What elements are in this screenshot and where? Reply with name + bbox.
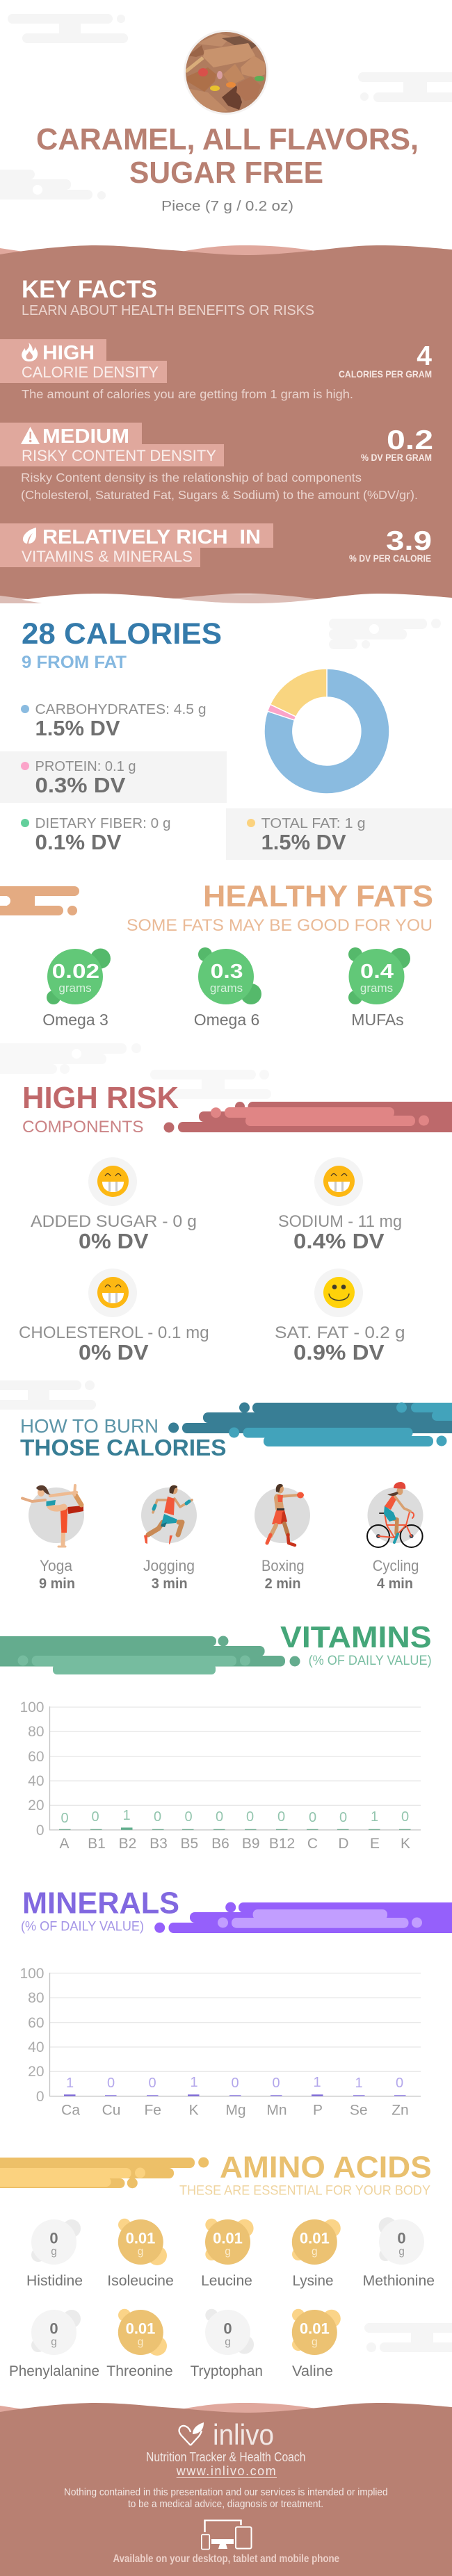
bar chart: vitamins: C bbox=[307, 1836, 318, 1852]
item: saturated fat: SAT. FAT - 0.2 g bbox=[275, 1323, 405, 1342]
serving size: Piece (7 g / 0.2 oz) bbox=[161, 199, 293, 214]
icon: cycling figure bbox=[367, 1482, 423, 1547]
bar chart: vitamins: 0 bbox=[184, 1809, 193, 1825]
bar chart: minerals: 100 bbox=[19, 1966, 45, 1982]
decorative bars bbox=[168, 1403, 452, 1446]
bar chart: vitamins: A bbox=[59, 1836, 70, 1852]
amino: isoleucine bbox=[107, 2219, 174, 2289]
icon: grinning face bbox=[97, 1277, 129, 1308]
amino: valine: g bbox=[312, 2336, 318, 2348]
panel: header bbox=[0, 14, 452, 214]
badge: omega 3: grams bbox=[58, 981, 92, 995]
panel: how to burn calories bbox=[0, 1380, 452, 1592]
bar chart: minerals: 20 bbox=[28, 2064, 45, 2080]
heading bbox=[21, 1887, 179, 1934]
amino: histidine: Histidine bbox=[26, 2272, 83, 2289]
item: added sugar: 0% DV bbox=[79, 1229, 149, 1253]
bar chart: minerals: 0 bbox=[231, 2076, 239, 2091]
fact: risky content density: MEDIUM bbox=[42, 425, 129, 448]
heading bbox=[20, 1415, 227, 1461]
amino: leucine: Leucine bbox=[201, 2272, 252, 2289]
bar chart: vitamins: 0 bbox=[60, 1811, 69, 1826]
bar chart: vitamins: 0 bbox=[246, 1809, 254, 1825]
item: cholesterol: 0% DV bbox=[79, 1340, 149, 1364]
heading: 9 FROM FAT bbox=[22, 653, 127, 672]
activity: cycling bbox=[367, 1482, 423, 1547]
legend: total fat bbox=[247, 816, 366, 854]
heading bbox=[22, 276, 314, 318]
amino: phenylalanine bbox=[9, 2310, 99, 2379]
bar chart: vitamins: 20 bbox=[28, 1798, 45, 1813]
amino: lysine: Lysine bbox=[292, 2272, 334, 2289]
bar chart: minerals: P bbox=[313, 2103, 323, 2119]
bar chart: vitamins: 1 bbox=[122, 1808, 131, 1823]
panel: key facts bbox=[0, 245, 452, 603]
badge: MUFAs bbox=[348, 947, 410, 1029]
legend: protein: PROTEIN: 0.1 g bbox=[35, 759, 136, 774]
legend: total fat: 1.5% DV bbox=[261, 830, 346, 854]
activity labels: 9 min bbox=[39, 1575, 75, 1592]
logo wordmark: inlivo bbox=[213, 2418, 274, 2451]
fact: risky content density: RISKY CONTENT DENSITY bbox=[22, 447, 216, 464]
bar chart: vitamins: 0 bbox=[154, 1809, 161, 1825]
bar chart: minerals: 1 bbox=[190, 2075, 198, 2090]
item: saturated fat bbox=[275, 1269, 405, 1364]
legend: protein: 0.3% DV bbox=[35, 773, 126, 797]
wave background bbox=[0, 245, 452, 603]
heading: HIGH RISK bbox=[22, 1082, 179, 1115]
bar chart: minerals: 0 bbox=[148, 2076, 156, 2091]
panel: amino acids bbox=[0, 2151, 452, 2379]
badge: MUFAs: grams bbox=[360, 981, 393, 995]
bar chart: minerals: Ca bbox=[61, 2103, 80, 2119]
legend: carbohydrates bbox=[21, 702, 206, 740]
decorative clouds bbox=[0, 1043, 271, 1099]
item: sodium bbox=[278, 1157, 402, 1253]
heading: AMINO ACIDS bbox=[220, 2151, 432, 2185]
badge: omega 6: Omega 6 bbox=[194, 1011, 259, 1029]
food photo: chocolate pieces bbox=[184, 30, 268, 115]
bar chart: vitamins: B2 bbox=[119, 1836, 136, 1852]
icon: smiling face bbox=[323, 1277, 355, 1308]
bar chart: vitamins: 0 bbox=[277, 1809, 285, 1825]
bar chart: minerals: K bbox=[189, 2103, 199, 2119]
icon: leaf bbox=[23, 528, 36, 544]
activity: boxing bbox=[255, 1484, 310, 1545]
bar chart: vitamins: 1 bbox=[371, 1809, 378, 1825]
amino: lysine: g bbox=[312, 2246, 318, 2258]
bar chart: vitamins bbox=[19, 1699, 421, 1852]
bar chart: minerals: Mn bbox=[266, 2103, 287, 2119]
heading: 28 CALORIES bbox=[22, 618, 222, 651]
bar chart: vitamins: 0 bbox=[309, 1810, 316, 1825]
bar chart: minerals: Cu bbox=[102, 2103, 120, 2119]
heading: LEARN ABOUT HEALTH BENEFITS OR RISKS bbox=[22, 303, 314, 318]
badge: omega 3: Omega 3 bbox=[42, 1011, 108, 1029]
amino: threonine: Threonine bbox=[106, 2363, 173, 2379]
amino: isoleucine: g bbox=[138, 2246, 143, 2258]
legend: total fat: TOTAL FAT: 1 g bbox=[261, 816, 366, 831]
bar chart: minerals: 0 bbox=[396, 2076, 403, 2091]
decorative cloud lower left bbox=[0, 170, 106, 199]
bar chart: vitamins: D bbox=[338, 1836, 349, 1852]
bar chart: minerals: 1 bbox=[313, 2075, 321, 2090]
bar chart: vitamins: B6 bbox=[211, 1836, 229, 1852]
item: sodium: SODIUM - 11 mg bbox=[278, 1212, 402, 1231]
item: cholesterol bbox=[19, 1269, 209, 1364]
amino: threonine: 0.01 bbox=[126, 2320, 155, 2338]
icon: flame bbox=[22, 343, 38, 361]
bar chart: vitamins: 0 bbox=[401, 1809, 409, 1825]
logo: heart with leaf bbox=[179, 2422, 204, 2445]
bar chart: minerals: 80 bbox=[28, 1990, 45, 2006]
amino: phenylalanine: g bbox=[51, 2336, 57, 2348]
amino: histidine bbox=[26, 2219, 83, 2289]
bar chart: vitamins: 60 bbox=[28, 1749, 45, 1765]
bar chart: minerals: 0 bbox=[36, 2089, 45, 2105]
decorative bars bbox=[154, 1902, 452, 1933]
activity labels: 3 min bbox=[152, 1575, 188, 1592]
amino: valine: 0.01 bbox=[300, 2320, 330, 2338]
item: added sugar: ADDED SUGAR - 0 g bbox=[31, 1212, 197, 1231]
decorative bars bbox=[164, 1102, 452, 1133]
icon: warning triangle bbox=[21, 427, 40, 444]
decorative cloud bbox=[364, 2323, 452, 2352]
legend: dietary fiber: 0.1% DV bbox=[35, 830, 122, 854]
fact: risky content density: Risky Content density is the relationship of bad components bbox=[21, 471, 362, 484]
decorative bars bbox=[0, 1636, 300, 1674]
amino: isoleucine: Isoleucine bbox=[107, 2272, 174, 2289]
bar chart: vitamins: B12 bbox=[269, 1836, 295, 1852]
amino: methionine: Methionine bbox=[363, 2272, 435, 2289]
heading: COMPONENTS bbox=[22, 1118, 143, 1136]
amino: leucine: g bbox=[225, 2246, 231, 2258]
bar chart: minerals: Fe bbox=[144, 2103, 161, 2119]
heading bbox=[22, 1082, 179, 1136]
amino: threonine: g bbox=[138, 2336, 143, 2348]
bar chart: minerals: 1 bbox=[66, 2076, 74, 2091]
heading: THOSE CALORIES bbox=[20, 1435, 227, 1461]
decorative bars bbox=[0, 2158, 209, 2188]
fact: calorie density: 4 bbox=[417, 341, 432, 371]
decorative cloud bbox=[0, 1380, 96, 1410]
bar chart: vitamins: 100 bbox=[19, 1699, 45, 1715]
heading bbox=[22, 618, 222, 672]
fact: risky content density: % DV PER GRAM bbox=[361, 453, 432, 463]
decorative cloud right bbox=[358, 72, 452, 102]
legend: carbohydrates: 1.5% DV bbox=[35, 716, 120, 740]
heading: HEALTHY FATS bbox=[203, 880, 433, 913]
decorative cloud left bbox=[8, 14, 128, 43]
fact: risky content density: 0.2 bbox=[387, 425, 433, 455]
title: SUGAR FREE bbox=[129, 156, 323, 190]
bar chart: vitamins: E bbox=[370, 1836, 380, 1852]
decorative bars bbox=[0, 886, 79, 915]
badge: omega 6: grams bbox=[210, 981, 243, 995]
bar chart: minerals: Mg bbox=[225, 2103, 246, 2119]
row backgrounds bbox=[0, 751, 452, 860]
bar chart: minerals: 1 bbox=[355, 2076, 363, 2091]
fact: vitamins and minerals: % DV PER CALORIE bbox=[349, 553, 431, 564]
badge: MUFAs: 0.4 bbox=[360, 961, 394, 983]
icon: devices bbox=[202, 2520, 252, 2550]
fact: vitamins and minerals bbox=[0, 523, 432, 567]
fact: calorie density: CALORIE DENSITY bbox=[22, 364, 159, 381]
panel: calories bbox=[0, 618, 452, 860]
fact: calorie density: The amount of calories you are getting from 1 gram is high. bbox=[22, 387, 353, 401]
amino: tryptophan: Tryptophan bbox=[191, 2363, 263, 2379]
activity labels: Cycling bbox=[373, 1557, 419, 1574]
activity labels: Boxing bbox=[261, 1557, 305, 1574]
legend: dietary fiber: DIETARY FIBER: 0 g bbox=[35, 816, 171, 831]
bar chart: vitamins: B9 bbox=[242, 1836, 260, 1852]
heading: VITAMINS bbox=[280, 1621, 432, 1654]
disclaimer: to be a medical advice, diagnosis or treatment. bbox=[128, 2498, 323, 2510]
legend: protein bbox=[21, 759, 136, 797]
amino: methionine: 0 bbox=[397, 2230, 406, 2247]
bar chart: minerals: 60 bbox=[28, 2015, 45, 2031]
activity labels: 4 min bbox=[377, 1575, 413, 1592]
badge: omega 3 bbox=[42, 948, 111, 1029]
item: cholesterol: CHOLESTEROL - 0.1 mg bbox=[19, 1323, 209, 1342]
amino: valine bbox=[292, 2309, 341, 2379]
bar chart: minerals: 0 bbox=[107, 2076, 115, 2091]
amino: phenylalanine: Phenylalanine bbox=[9, 2363, 99, 2379]
heading: (% OF DAILY VALUE) bbox=[21, 1919, 144, 1934]
website link: www.inlivo.com bbox=[176, 2464, 276, 2478]
disclaimer: Nothing contained in this presentation and our services is intended or implied bbox=[64, 2486, 388, 2498]
bar chart: vitamins: B1 bbox=[88, 1836, 106, 1852]
amino: methionine: g bbox=[398, 2246, 405, 2258]
title: CARAMEL, ALL FLAVORS, bbox=[36, 123, 419, 156]
bar chart: vitamins: 0 bbox=[339, 1810, 347, 1825]
panel: minerals bbox=[19, 1887, 452, 2119]
amino: tryptophan: g bbox=[225, 2336, 231, 2348]
heading bbox=[127, 880, 433, 935]
amino: threonine bbox=[106, 2309, 173, 2379]
amino: histidine: 0 bbox=[49, 2230, 58, 2247]
badge: omega 6 bbox=[194, 947, 261, 1029]
amino: valine: Valine bbox=[292, 2363, 333, 2379]
bar chart: minerals: Zn bbox=[392, 2103, 409, 2119]
heading: SOME FATS MAY BE GOOD FOR YOU bbox=[127, 916, 433, 935]
heading: MINERALS bbox=[22, 1887, 179, 1921]
bar chart: minerals: 40 bbox=[28, 2039, 45, 2055]
bar chart: vitamins: B3 bbox=[150, 1836, 168, 1852]
item: sodium: 0.4% DV bbox=[293, 1229, 385, 1253]
fact: risky content density: (Cholesterol, Saturated Fat, Sugars & Sodium) to the amount (%DV/gr). bbox=[21, 488, 418, 502]
icon: grinning face bbox=[323, 1166, 355, 1197]
amino: methionine bbox=[363, 2217, 435, 2289]
donut chart bbox=[264, 669, 389, 794]
amino: leucine: 0.01 bbox=[213, 2230, 243, 2247]
badge: MUFAs: MUFAs bbox=[351, 1011, 404, 1029]
activity: yoga bbox=[22, 1485, 84, 1547]
amino: leucine bbox=[201, 2219, 254, 2289]
heading: HOW TO BURN bbox=[20, 1415, 159, 1437]
legend: carbohydrates: CARBOHYDRATES: 4.5 g bbox=[35, 702, 206, 717]
fact: calorie density: CALORIES PER GRAM bbox=[339, 369, 432, 380]
activity labels: Yoga bbox=[40, 1557, 72, 1574]
bar chart: vitamins: 80 bbox=[28, 1724, 45, 1740]
amino: histidine: g bbox=[51, 2246, 57, 2258]
bar chart: vitamins: 0 bbox=[216, 1809, 223, 1825]
bar chart: vitamins: B5 bbox=[181, 1836, 198, 1852]
activity labels: 2 min bbox=[265, 1575, 301, 1592]
bar chart: vitamins: 0 bbox=[36, 1823, 45, 1839]
activity labels bbox=[39, 1557, 419, 1592]
tagline: Nutrition Tracker & Health Coach bbox=[146, 2450, 306, 2464]
amino: phenylalanine: 0 bbox=[49, 2320, 58, 2338]
availability note: Available on your desktop, tablet and mobile phone bbox=[113, 2553, 339, 2565]
bar chart: vitamins: K bbox=[401, 1836, 410, 1852]
amino: lysine: 0.01 bbox=[300, 2230, 330, 2247]
heading: (% OF DAILY VALUE) bbox=[309, 1653, 432, 1668]
bar chart: minerals bbox=[19, 1966, 421, 2119]
panel: vitamins bbox=[0, 1621, 432, 1852]
panel: footer bbox=[0, 2403, 452, 2576]
heading: KEY FACTS bbox=[22, 276, 157, 303]
amino: tryptophan bbox=[191, 2309, 263, 2379]
amino: tryptophan: 0 bbox=[223, 2320, 232, 2338]
disclaimer bbox=[64, 2486, 388, 2510]
fact: calorie density: HIGH bbox=[42, 342, 95, 364]
bar chart: minerals: 0 bbox=[272, 2076, 280, 2091]
heading: THESE ARE ESSENTIAL FOR YOUR BODY bbox=[179, 2183, 430, 2199]
decorative cloud bbox=[329, 619, 441, 649]
fact: vitamins and minerals: 3.9 bbox=[386, 526, 432, 556]
amino: isoleucine: 0.01 bbox=[126, 2230, 155, 2247]
item: added sugar bbox=[31, 1157, 197, 1253]
heading bbox=[280, 1621, 432, 1668]
icon: jogging figure bbox=[144, 1485, 192, 1544]
item: saturated fat: 0.9% DV bbox=[293, 1340, 385, 1364]
bar chart: vitamins: 0 bbox=[91, 1809, 99, 1825]
fact: vitamins and minerals: RELATIVELY RICH IN bbox=[42, 526, 261, 548]
legend: dietary fiber bbox=[21, 816, 171, 854]
heading bbox=[179, 2151, 432, 2199]
activity labels: Jogging bbox=[143, 1557, 195, 1574]
title bbox=[36, 123, 419, 190]
icon: yoga figure bbox=[22, 1485, 83, 1547]
wave background bbox=[0, 2403, 452, 2576]
badge: omega 6: 0.3 bbox=[211, 961, 243, 983]
fact: vitamins and minerals: VITAMINS & MINERALS bbox=[22, 548, 193, 565]
bar chart: vitamins: 40 bbox=[28, 1773, 45, 1789]
panel: healthy fats bbox=[0, 880, 433, 1029]
activity: jogging bbox=[141, 1485, 197, 1544]
badge: omega 3: 0.02 bbox=[52, 961, 99, 983]
amino: lysine bbox=[292, 2219, 341, 2289]
fact: risky content density bbox=[0, 423, 433, 502]
fact: calorie density bbox=[0, 339, 432, 401]
icon: grinning face bbox=[97, 1166, 129, 1197]
bar chart: minerals: Se bbox=[350, 2103, 368, 2119]
icon: boxing figure bbox=[267, 1484, 304, 1545]
panel: high risk components bbox=[0, 1043, 452, 1364]
